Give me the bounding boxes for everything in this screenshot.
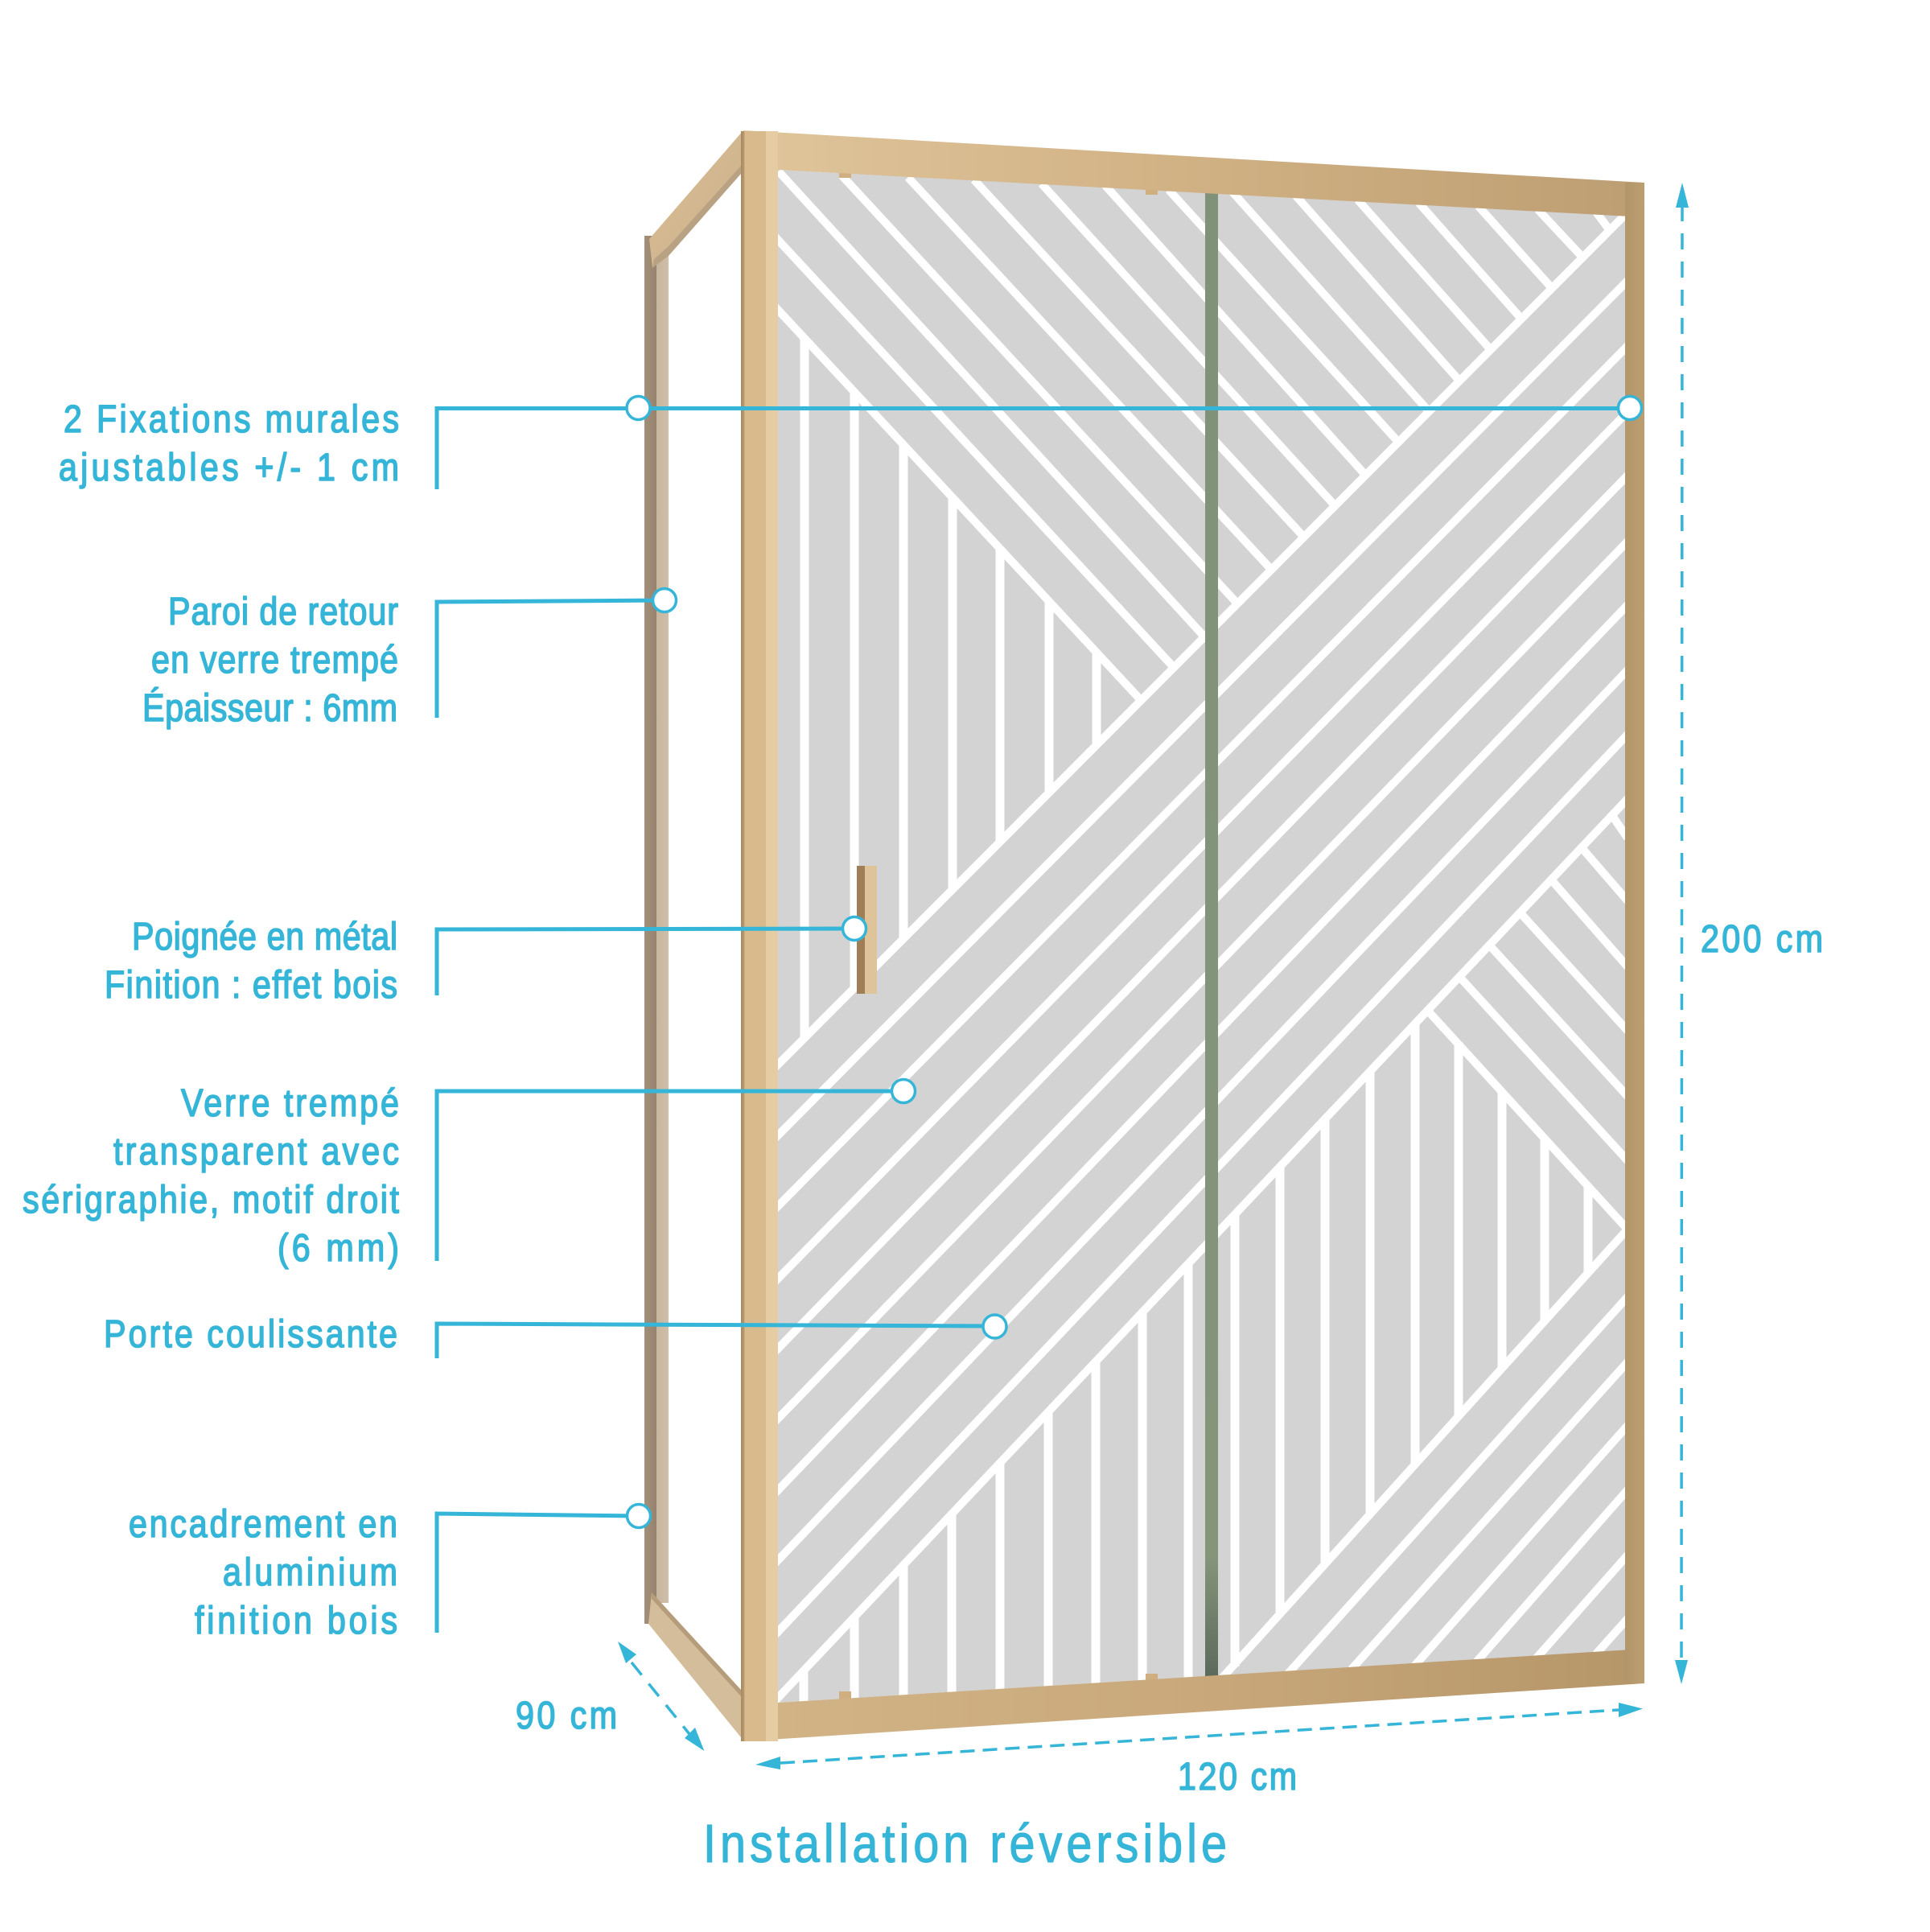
handle bbox=[857, 866, 877, 994]
panel: silk-screened glass door bbox=[778, 170, 1625, 1710]
callout: poignée: Poignée en métal bbox=[132, 915, 397, 958]
callout: fixations murales bbox=[59, 396, 1641, 489]
callout: paroi de retour: Paroi de retour bbox=[168, 590, 398, 633]
upper-left diagonal lines bbox=[778, 174, 1609, 700]
callout: poignée bbox=[105, 915, 866, 1007]
callout: verre trempé bbox=[23, 1080, 915, 1270]
callout: fixations murales: 2 Fixations murales bbox=[64, 398, 399, 441]
callout: paroi de retour: Épaisseur : 6mm bbox=[142, 686, 397, 730]
door guide clips bbox=[839, 171, 1158, 1701]
callout: paroi de retour bbox=[142, 589, 677, 730]
shower enclosure bbox=[644, 130, 1644, 1741]
callout: verre trempé: sérigraphie, motif droit bbox=[23, 1178, 400, 1221]
callout: porte coulissante bbox=[104, 1312, 1006, 1358]
central diagonal band lines bbox=[778, 215, 1625, 1698]
lower vertical lines bbox=[804, 1024, 1588, 1710]
footer title: Installation réversible bbox=[703, 1814, 1227, 1874]
callout: verre trempé: (6 mm) bbox=[278, 1226, 399, 1270]
dimension: 90 cm depth bbox=[516, 1642, 704, 1751]
callout: encadrement bbox=[129, 1502, 651, 1642]
upper-left vertical lines bbox=[805, 338, 1097, 1038]
callout: encadrement: encadrement en bbox=[129, 1502, 397, 1546]
dimension: 120 cm width: 120 cm bbox=[1178, 1755, 1297, 1798]
callout: encadrement: finition bois bbox=[195, 1599, 397, 1642]
callout: paroi de retour: en verre trempé bbox=[151, 638, 398, 682]
callout: poignée: Finition : effet bois bbox=[105, 963, 397, 1007]
callout: verre trempé: Verre trempé bbox=[181, 1081, 399, 1125]
central door post bbox=[1205, 192, 1218, 1676]
side return wall frame bbox=[644, 130, 744, 1741]
dimension: 200 cm height: 200 cm bbox=[1701, 917, 1823, 961]
callout: verre trempé: transparent avec bbox=[113, 1130, 399, 1173]
callout: fixations murales: ajustables +/- 1 cm bbox=[59, 446, 399, 489]
callout: porte coulissante: Porte coulissante bbox=[104, 1312, 397, 1356]
lower-right diagonal lines bbox=[1224, 819, 1625, 1675]
callout: encadrement: aluminium bbox=[223, 1551, 397, 1594]
dimension: 90 cm depth: 90 cm bbox=[516, 1694, 617, 1737]
dimension: 120 cm width bbox=[755, 1703, 1643, 1798]
wood frame bbox=[741, 130, 1644, 1741]
dimension: 200 cm height bbox=[1675, 183, 1823, 1684]
